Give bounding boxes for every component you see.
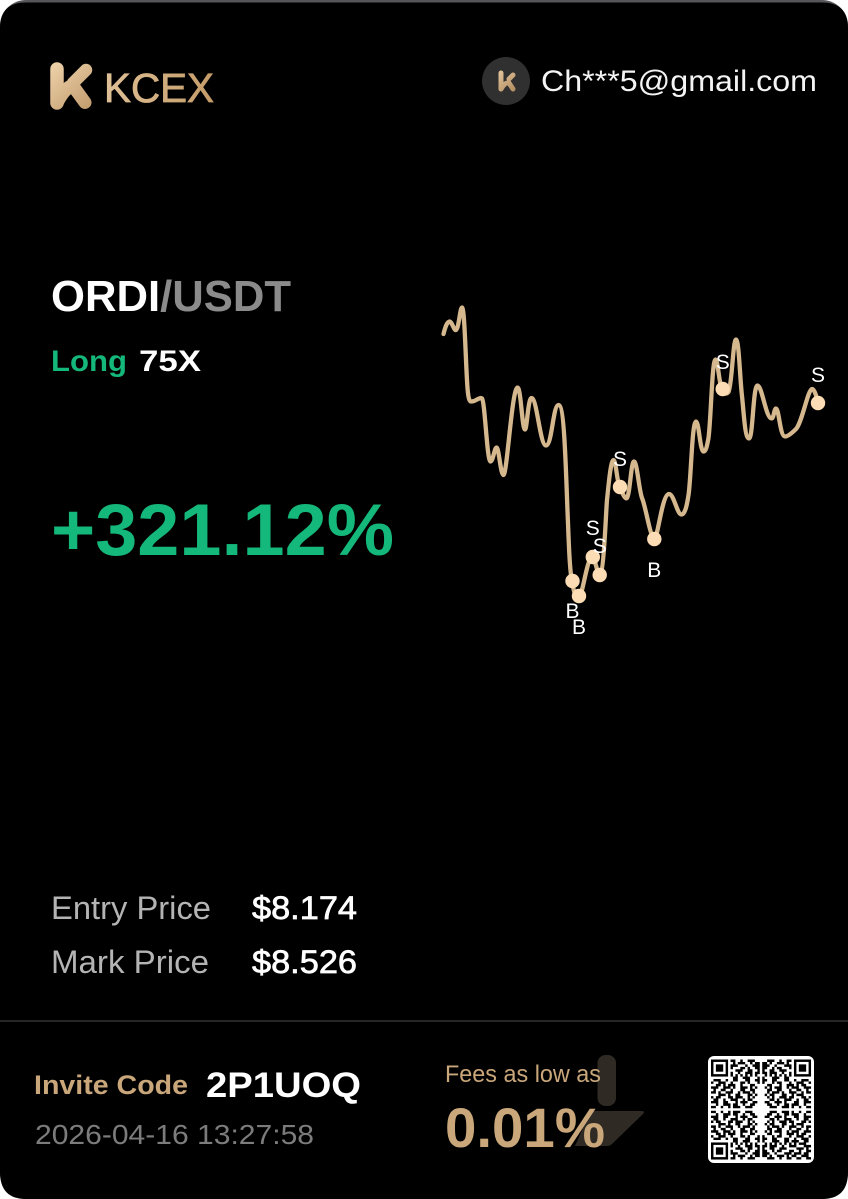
price line chart xyxy=(444,308,825,639)
icon: KCEX K mark xyxy=(57,69,86,103)
invite code: 2P1UOQ xyxy=(206,1066,361,1105)
QR code xyxy=(708,1056,814,1163)
invite code: Invite Code xyxy=(34,1070,188,1100)
position direction and leverage xyxy=(51,345,201,378)
fees label: Fees as low as xyxy=(445,1061,601,1088)
trade labels: S xyxy=(593,535,607,558)
user account xyxy=(482,57,817,105)
entry price row: $8.174 xyxy=(252,890,357,926)
mark price row: Mark Price xyxy=(51,944,209,980)
trade labels: B xyxy=(565,600,580,623)
profit percentage: +321.12% xyxy=(51,490,394,571)
trade labels xyxy=(565,351,825,639)
trade labels: S xyxy=(613,448,627,471)
mark price row xyxy=(51,944,357,980)
fees promo xyxy=(445,1055,644,1159)
trade labels: S xyxy=(716,351,730,374)
logo wordmark: KCEX xyxy=(104,65,214,111)
trade labels: B xyxy=(572,616,586,639)
trade labels: S xyxy=(586,517,600,540)
position direction and leverage: Long xyxy=(51,345,127,378)
entry price row: Entry Price xyxy=(51,890,211,926)
timestamp: 2026-04-16 13:27:58 xyxy=(35,1119,314,1150)
position direction and leverage: 75X xyxy=(139,345,201,378)
price line xyxy=(444,308,818,598)
KCEX logo xyxy=(57,65,214,111)
invite code xyxy=(34,1066,361,1105)
trade labels: S xyxy=(811,364,825,387)
mark price row: $8.526 xyxy=(252,944,357,980)
entry price row xyxy=(51,890,357,926)
trade labels: B xyxy=(647,559,661,582)
trading pair: ORDI/USDT xyxy=(51,272,291,321)
user email: Ch***5@gmail.com xyxy=(541,65,817,98)
icon: down arrow xyxy=(575,1055,644,1146)
fee rate: 0.01% xyxy=(445,1096,605,1159)
trade markers xyxy=(565,382,825,603)
icon: avatar xyxy=(482,57,530,105)
